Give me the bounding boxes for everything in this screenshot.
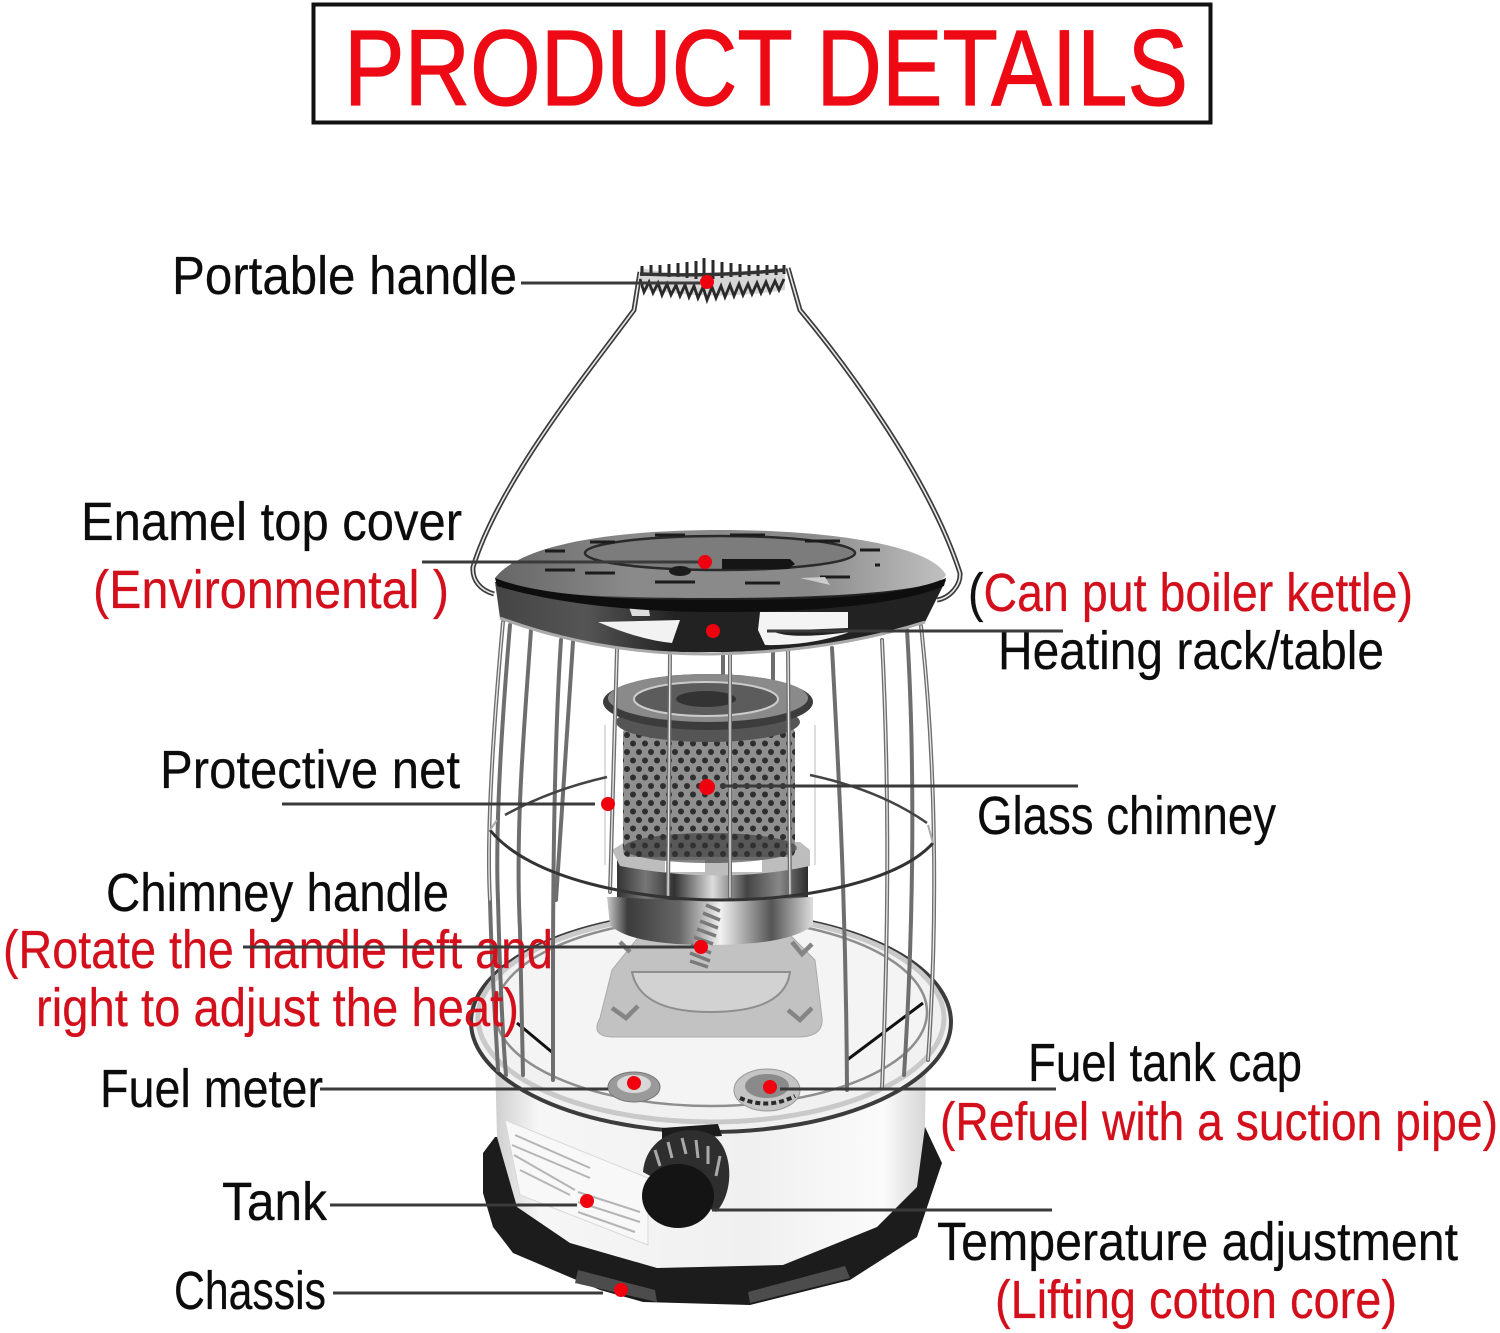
- label: chassis: Chassis: [174, 1261, 326, 1321]
- tank: [495, 1060, 926, 1268]
- tank sticker: [505, 1120, 648, 1245]
- chassis: [483, 1127, 942, 1305]
- label: temperature adjustment: [712, 1210, 1458, 1330]
- label: heating rack/table: [706, 563, 1413, 681]
- label: glass chimney: [699, 779, 1276, 846]
- rear wires: [723, 650, 773, 680]
- label: heating rack/table: (Can put boiler kettle): [968, 563, 1413, 623]
- base bowl: [471, 912, 951, 1132]
- label: tank: [222, 1172, 594, 1232]
- portable handle wire: [473, 258, 960, 600]
- label: protective net: Protective net: [160, 740, 460, 800]
- top skirt: [495, 580, 946, 652]
- label: enamel top cover: Enamel top cover: [81, 492, 462, 552]
- temperature knob: [642, 1124, 729, 1228]
- label: enamel top cover: [81, 492, 712, 620]
- fuel meter: [608, 1072, 660, 1102]
- label: protective net: [160, 740, 615, 811]
- heater illustration: [471, 258, 960, 1305]
- label: chassis: [174, 1261, 628, 1321]
- label: fuel tank cap: Fuel tank cap: [1028, 1033, 1302, 1093]
- label: fuel meter: [100, 1059, 641, 1119]
- label: chimney handle: (Rotate the handle left and: [3, 920, 553, 980]
- protective net wires: [489, 622, 934, 1090]
- label: fuel tank cap: [763, 1033, 1498, 1152]
- fuel tank cap: [734, 1069, 800, 1111]
- wing nuts: [612, 942, 812, 1020]
- base plate: [597, 935, 822, 1037]
- enamel top cover: [495, 530, 946, 612]
- title: PRODUCT DETAILS: [344, 7, 1188, 128]
- label: temperature adjustment: (Lifting cotton core): [995, 1270, 1397, 1330]
- label: heating rack/table: Heating rack/table: [998, 621, 1384, 681]
- label: enamel top cover: (Environmental ): [93, 560, 449, 620]
- label: fuel meter: Fuel meter: [100, 1059, 323, 1119]
- label: portable handle: Portable handle: [172, 246, 517, 306]
- chimney handle spring: [690, 905, 720, 967]
- label: chimney handle: Chimney handle: [106, 863, 449, 923]
- label: glass chimney: Glass chimney: [977, 786, 1276, 846]
- net rings: [505, 775, 927, 823]
- chimney body: [603, 674, 815, 901]
- label: chimney handle: [3, 863, 708, 1038]
- label: chimney handle: right to adjust the heat): [36, 978, 519, 1038]
- label: portable handle: [172, 246, 714, 306]
- label: tank: Tank: [222, 1172, 328, 1232]
- chimney lower cone: [607, 897, 813, 945]
